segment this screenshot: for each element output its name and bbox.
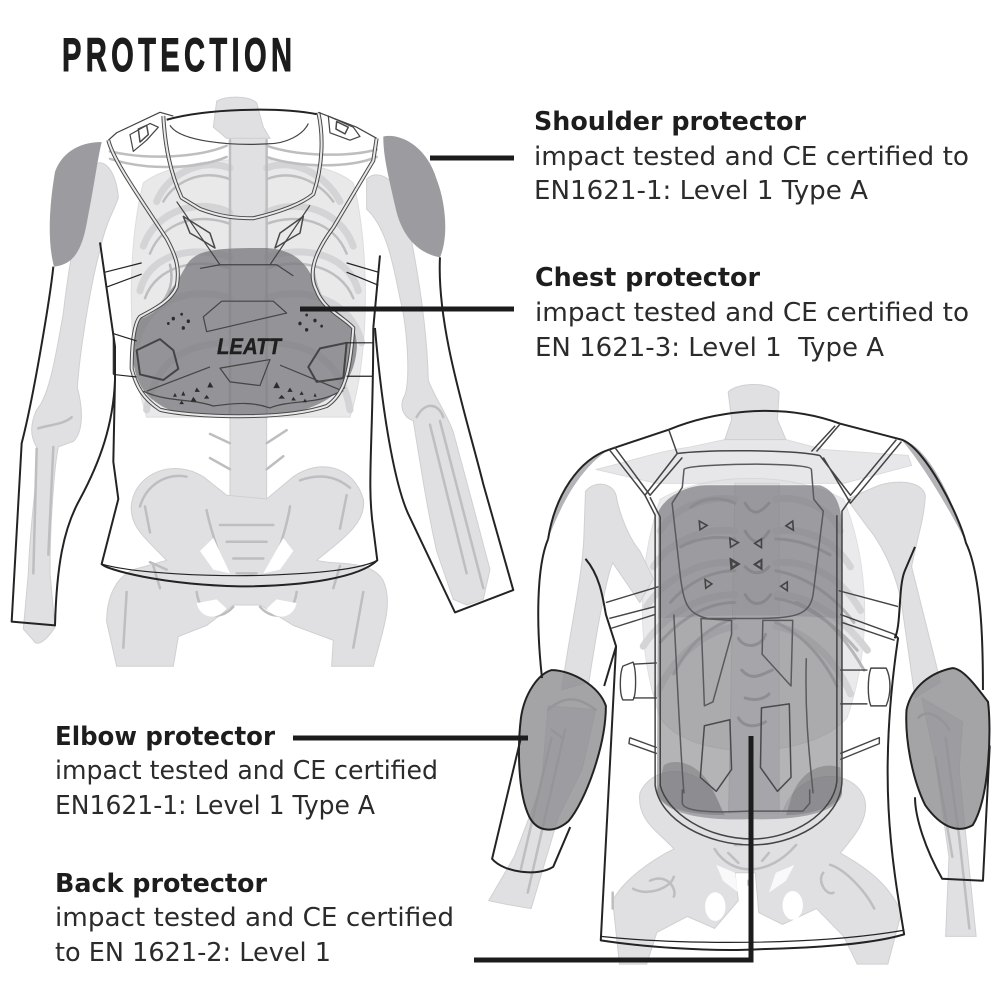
panel: left shoulder protector (50, 142, 102, 267)
text block: back protector (55, 869, 454, 968)
panel: left elbow protector (519, 670, 606, 830)
text block: back protector: to EN 1621-2: Level 1 (55, 938, 331, 968)
text block: chest protector: EN 1621-3: Level 1 Type A (535, 333, 884, 363)
illustration: back view of protector on skeleton (489, 384, 990, 964)
leader line: chest (300, 306, 514, 312)
panel: chest protector (133, 248, 357, 417)
skeleton: back (489, 384, 976, 964)
panel: back protector (657, 464, 842, 819)
skeleton: front (23, 97, 490, 666)
icon: vent triangles (699, 521, 793, 591)
panel: right elbow protector (906, 668, 989, 829)
leader line: back (474, 736, 751, 960)
text block: elbow protector (55, 722, 438, 821)
outline: vest front (108, 110, 377, 416)
text block: back protector: impact tested and CE certified (55, 903, 454, 933)
title: PROTECTION (62, 30, 292, 82)
panel: right shoulder protector (383, 136, 445, 257)
leader line: elbow (293, 736, 528, 740)
leader line: shoulder (430, 156, 514, 160)
icon: perforation dots (167, 313, 323, 404)
illustration: front view of protector on skeleton (12, 97, 513, 666)
text block: shoulder protector: EN1621-1: Level 1 Type A (534, 176, 868, 206)
text block: chest protector: Chest protector (535, 263, 760, 293)
text block: shoulder protector: impact tested and CE certified to (534, 142, 969, 172)
text block: shoulder protector (534, 107, 969, 206)
panel: shoulder slivers (548, 440, 964, 539)
text block: chest protector (535, 263, 969, 363)
text block: elbow protector: Elbow protector (55, 722, 275, 752)
text block: back protector: Back protector (55, 869, 267, 899)
outline: jacket front (12, 242, 513, 625)
text block: elbow protector: impact tested and CE certified (55, 756, 438, 786)
text block: shoulder protector: Shoulder protector (534, 107, 806, 137)
text block: elbow protector: EN1621-1: Level 1 Type A (55, 791, 375, 821)
logo: LEATT: LEATT (217, 334, 282, 359)
text block: chest protector: impact tested and CE certified to (535, 298, 969, 328)
outline: jacket back (492, 411, 990, 950)
